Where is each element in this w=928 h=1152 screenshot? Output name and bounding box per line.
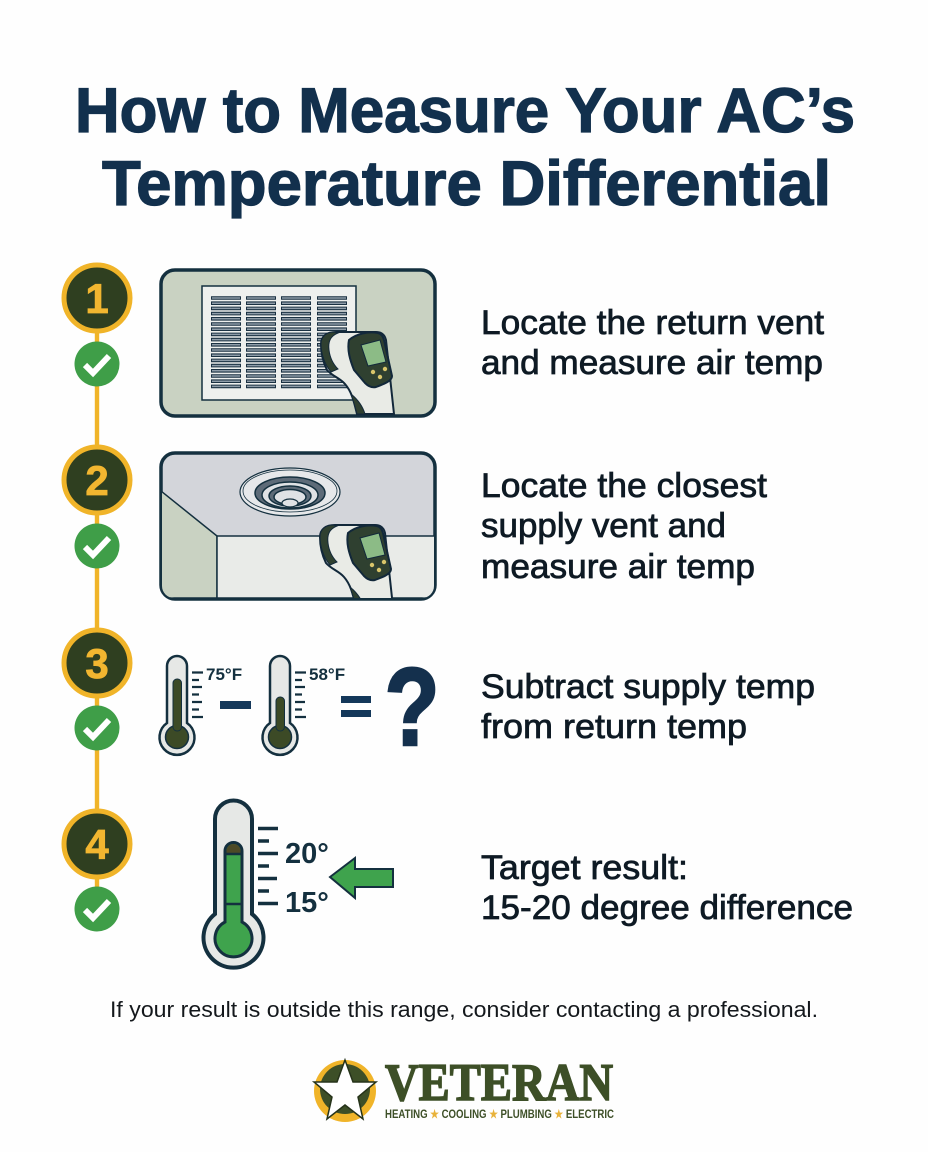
target range thermometer [204, 800, 329, 968]
step 2 text: supply vent and [481, 507, 726, 545]
logo wordmark: VETERAN [385, 1054, 613, 1112]
step 1 text: Locate the return vent [481, 304, 825, 342]
thermometer 58°F: 58°F [309, 665, 345, 684]
footer note: If your result is outside this range, consider contacting a professional. [110, 997, 818, 1022]
step 1 number badge [64, 265, 130, 331]
title [75, 76, 855, 219]
thermometer 75°F: 75°F [206, 665, 242, 684]
company logo [314, 1054, 614, 1122]
title: Temperature Differential [102, 149, 831, 219]
step 1 text: and measure air temp [481, 344, 823, 382]
step 3 text: from return temp [481, 708, 747, 746]
step 2 check icon [74, 524, 120, 568]
step 3 number badge [64, 630, 130, 696]
question mark: ? [384, 646, 440, 769]
minus sign [220, 701, 251, 709]
step 1 check icon [74, 342, 120, 386]
step 3 text: Subtract supply temp [481, 668, 815, 706]
logo tagline: HEATING ★ COOLING ★ PLUMBING ★ ELECTRIC [385, 1108, 614, 1121]
step 4 text: Target result: [481, 849, 688, 887]
step 4 number badge: 4 [85, 821, 109, 868]
step 2 text: Locate the closest [481, 467, 768, 505]
step 2 text: measure air temp [481, 548, 755, 586]
arrow pointing to target range [330, 858, 393, 898]
scale labels: 20° [285, 838, 329, 870]
step 1 text [481, 304, 825, 382]
panel: supply vent illustration [161, 453, 435, 607]
thermometer 58°F [262, 656, 345, 755]
panel: return vent illustration [161, 270, 435, 416]
step 2 number badge [64, 447, 130, 513]
step 3 text [481, 668, 815, 746]
step 3 check icon [74, 706, 120, 750]
subtraction equation icons [160, 646, 440, 769]
equals sign [341, 696, 371, 717]
return vent grille [202, 286, 356, 400]
title: How to Measure Your AC’s [75, 76, 855, 146]
step 1 number badge: 1 [85, 275, 109, 322]
thermometer 75°F [160, 656, 242, 755]
infographic canvas [62, 87, 854, 1122]
step 4 check icon [74, 886, 120, 932]
step 2 number badge: 2 [85, 457, 109, 504]
infrared thermometer [321, 332, 394, 414]
logo star emblem [314, 1060, 376, 1122]
step 4 text [481, 849, 853, 927]
step 4 number badge [64, 811, 130, 877]
target range thermometer: 15° [285, 887, 329, 919]
step 4 text: 15-20 degree difference [481, 889, 853, 927]
step 3 number badge: 3 [85, 640, 109, 687]
infrared thermometer [320, 525, 393, 607]
timeline connector [95, 298, 99, 909]
ceiling supply diffuser [240, 468, 340, 516]
step 2 text [481, 467, 768, 586]
